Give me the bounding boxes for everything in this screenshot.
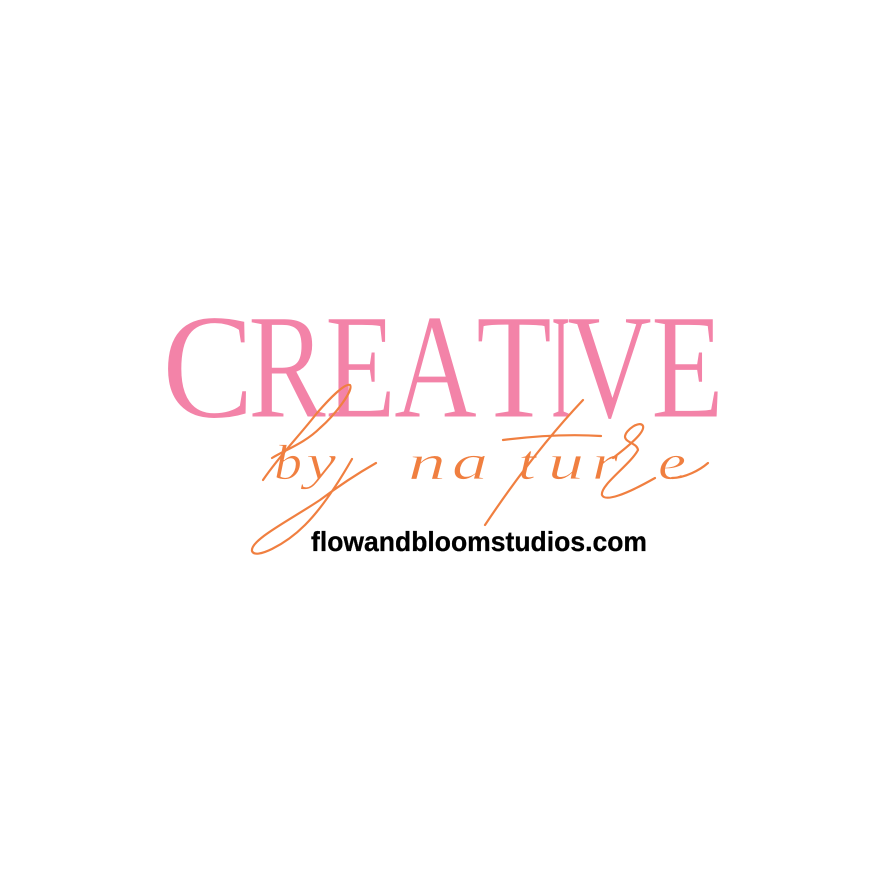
script tagline: by nature: a	[452, 434, 488, 490]
script tagline: by nature: e	[658, 434, 686, 490]
heading: CREATIVE: A	[394, 284, 477, 450]
script tagline: by nature: r	[592, 434, 619, 490]
heading: CREATIVE: I	[551, 284, 571, 450]
website url: flowandbloomstudios.com	[311, 526, 647, 557]
heading: CREATIVE: R	[248, 284, 326, 450]
script tagline: by nature: b	[274, 434, 302, 490]
script tagline: by nature: y	[299, 434, 337, 490]
heading: CREATIVE	[162, 284, 724, 450]
script tagline: by nature	[274, 434, 686, 490]
decorative script flourishes	[252, 385, 708, 554]
heading: CREATIVE: E	[651, 284, 724, 450]
heading: CREATIVE: V	[567, 284, 652, 450]
script tagline: by nature: n	[408, 434, 446, 490]
script tagline: by nature: t	[518, 434, 537, 490]
script tagline: by nature: u	[548, 434, 584, 490]
heading: CREATIVE: T	[476, 284, 552, 450]
heading: CREATIVE: C	[162, 284, 254, 450]
heading: CREATIVE: E	[325, 284, 396, 450]
